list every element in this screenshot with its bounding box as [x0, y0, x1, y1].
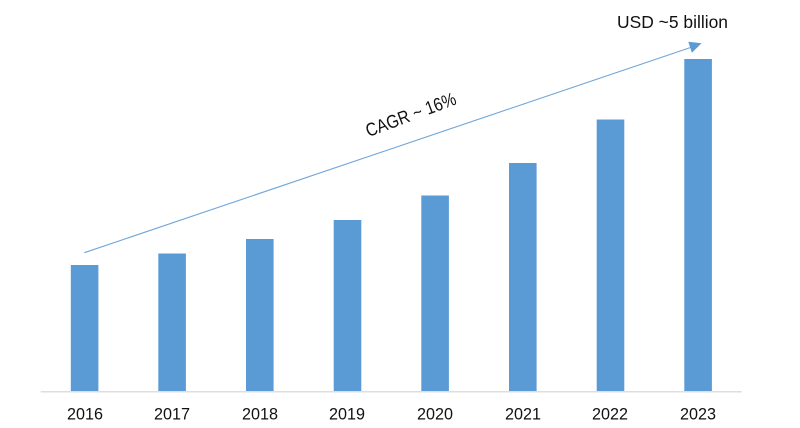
x-axis year labels: 2021 — [505, 404, 541, 424]
x-axis year labels — [67, 404, 716, 424]
CAGR label: CAGR ~ 16% — [363, 88, 459, 141]
x-axis year labels: 2016 — [67, 404, 103, 424]
x-axis year labels: 2019 — [329, 404, 365, 424]
x-axis year labels: 2017 — [154, 404, 190, 424]
x-axis year labels: 2018 — [242, 404, 278, 424]
arrow: growth trend — [84, 42, 702, 253]
x-axis year labels: 2023 — [680, 404, 716, 424]
bars — [71, 59, 712, 391]
x-axis year labels: 2020 — [417, 404, 453, 424]
x-axis year labels: 2022 — [592, 404, 628, 424]
market value callout: USD ~5 billion — [617, 12, 728, 32]
